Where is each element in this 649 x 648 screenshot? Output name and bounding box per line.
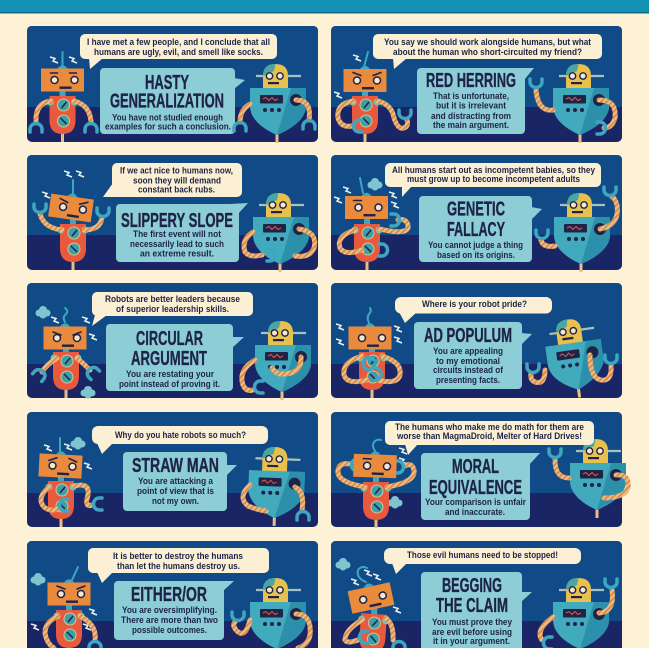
title box: red herring: RED HERRING xyxy=(426,69,516,92)
title box: straw man xyxy=(123,452,237,511)
speech bubble: either/or: than let the humans destroy us. xyxy=(117,561,240,572)
title box: straw man: point of view that is xyxy=(137,486,214,497)
speech bubble: circular argument xyxy=(92,292,253,326)
title box: moral equivalence: and inaccurate. xyxy=(445,507,505,518)
speech bubble: moral equivalence xyxy=(385,421,594,455)
panel: ad populum xyxy=(331,283,622,401)
title box: circular argument xyxy=(106,324,244,391)
title box: hasty generalization: examples for such a conclusion. xyxy=(105,122,231,132)
title box: begging the claim: THE CLAIM xyxy=(436,594,508,617)
speech bubble: slippery slope: constant back rubs. xyxy=(138,184,215,196)
robot: right listener xyxy=(536,187,617,272)
title box: slippery slope: The first event will not xyxy=(133,229,222,240)
robot: right listener xyxy=(527,315,617,401)
title box: circular argument: ARGUMENT xyxy=(131,347,207,370)
title box: ad populum: You are appealing xyxy=(433,346,503,357)
title box: straw man: not my own. xyxy=(152,496,199,507)
speech bubble: red herring: about the human who short-circuited my friend? xyxy=(393,47,582,58)
speech bubble: hasty generalization xyxy=(80,34,277,69)
title box: circular argument: point instead of proving it. xyxy=(119,379,220,390)
robot: left speaker xyxy=(33,306,99,398)
title box: moral equivalence: Your comparison is unfair xyxy=(425,497,526,508)
title box: ad populum xyxy=(414,322,532,389)
speech bubble: genetic fallacy: must grow up to become incompetent adults xyxy=(407,174,580,185)
speech bubble: begging the claim: Those evil humans need to be stopped! xyxy=(407,550,558,561)
robot: left speaker xyxy=(334,178,408,270)
title box: red herring: and distracting from xyxy=(431,111,511,122)
title box: red herring: That is unfortunate, xyxy=(433,91,509,102)
robot: left speaker xyxy=(338,440,414,528)
speech bubble: straw man xyxy=(92,426,268,454)
title box: hasty generalization xyxy=(100,68,245,134)
title box: red herring: but it is irrelevant xyxy=(436,101,507,112)
panel: circular argument xyxy=(27,283,318,400)
speech bubble: slippery slope: If we act nice to humans now, xyxy=(120,165,233,176)
speech bubble: straw man: Why do you hate robots so much? xyxy=(115,430,246,441)
speech bubble: either/or: It is better to destroy the humans xyxy=(113,551,243,562)
robot: left speaker xyxy=(30,52,97,142)
title box: begging the claim: BEGGING xyxy=(442,574,502,597)
title box: hasty generalization: HASTY xyxy=(145,71,189,94)
robot: left speaker xyxy=(336,308,402,398)
robot: right listener xyxy=(243,446,309,527)
title box: circular argument: CIRCULAR xyxy=(136,327,203,350)
title box: begging the claim: You must prove they xyxy=(432,617,513,628)
title box: moral equivalence: MORAL xyxy=(452,455,499,478)
title box: straw man: STRAW MAN xyxy=(132,454,219,477)
title box: ad populum: circuits instead of xyxy=(433,365,504,376)
title box: slippery slope: necessarily lead to such xyxy=(130,239,224,250)
title box: hasty generalization: You have not studied enough xyxy=(112,112,223,124)
speech bubble: either/or xyxy=(88,548,269,583)
speech bubble: hasty generalization: humans are ugly, evil, and smell like socks. xyxy=(94,47,263,58)
title box: slippery slope: an extreme result. xyxy=(140,249,214,260)
speech bubble: red herring: You say we should work alongside humans, but what xyxy=(384,37,592,48)
robot: right listener xyxy=(530,64,615,143)
title box: either/or xyxy=(114,581,234,640)
panel: either/or xyxy=(27,541,318,648)
title box: hasty generalization: GENERALIZATION xyxy=(110,90,224,112)
robot: right listener xyxy=(244,193,315,272)
panel: red herring xyxy=(331,26,622,143)
panel: straw man xyxy=(27,412,318,527)
speech bubble: slippery slope: soon they will demand xyxy=(133,176,221,186)
title box: begging the claim: are evil before using xyxy=(432,627,512,638)
panel: hasty generalization xyxy=(27,26,318,143)
title box: either/or: You are oversimplifying. xyxy=(122,605,217,616)
robot: left speaker xyxy=(336,558,405,648)
title box: slippery slope xyxy=(116,203,248,262)
speech bubble: genetic fallacy: All humans start out as incompetent babies, so they xyxy=(392,165,596,176)
robot: left speaker xyxy=(334,52,411,142)
title box: moral equivalence: EQUIVALENCE xyxy=(429,476,522,499)
title box: ad populum: AD POPULUM xyxy=(424,324,512,347)
title box: moral equivalence xyxy=(421,453,540,520)
title box: begging the claim: it in your argument. xyxy=(433,636,510,647)
title box: red herring xyxy=(417,68,534,134)
speech bubble: ad populum xyxy=(395,297,552,323)
robot: left speaker xyxy=(30,567,101,648)
speech bubble: slippery slope xyxy=(103,163,242,197)
title box: genetic fallacy xyxy=(419,196,542,262)
panel: genetic fallacy xyxy=(331,155,622,272)
robot: right listener xyxy=(540,578,617,648)
title box: either/or: possible outcomes. xyxy=(132,625,207,636)
speech bubble: begging the claim xyxy=(384,548,581,574)
robot: left speaker xyxy=(34,171,109,270)
speech bubble: red herring xyxy=(373,34,602,69)
robot: left speaker xyxy=(38,437,102,527)
robot: right listener xyxy=(234,64,315,143)
robot: right listener xyxy=(549,439,628,518)
title box: genetic fallacy: based on its origins. xyxy=(437,250,515,261)
speech bubble: moral equivalence: The humans who make me do math for them are xyxy=(395,422,584,433)
title box: slippery slope: SLIPPERY SLOPE xyxy=(121,209,233,232)
speech bubble: circular argument: Robots are better leaders because xyxy=(105,294,240,305)
title box: ad populum: presenting facts. xyxy=(436,375,500,386)
speech bubble: circular argument: of superior leadership skills. xyxy=(116,304,229,315)
speech bubble: moral equivalence: worse than MagmaDroid, Melter of Hard Drives! xyxy=(396,431,582,442)
title box: ad populum: to my emotional xyxy=(436,356,500,367)
panel: moral equivalence xyxy=(331,412,628,528)
panel: begging the claim xyxy=(331,541,622,648)
title box: straw man: You are attacking a xyxy=(138,476,214,487)
robot: right listener xyxy=(242,321,311,400)
title box: red herring: the main argument. xyxy=(433,120,509,131)
title box: genetic fallacy: You cannot judge a thing xyxy=(428,240,523,251)
speech bubble: genetic fallacy xyxy=(385,163,601,197)
title box: genetic fallacy: GENETIC xyxy=(447,198,505,221)
speech bubble: ad populum: Where is your robot pride? xyxy=(422,299,527,310)
title box: begging the claim xyxy=(421,572,532,648)
robot: right listener xyxy=(232,578,310,648)
title box: either/or: There are more than two xyxy=(121,615,218,626)
title box: circular argument: You are restating your xyxy=(126,369,214,380)
header band xyxy=(0,0,649,14)
panel: slippery slope xyxy=(27,155,318,272)
title box: either/or: EITHER/OR xyxy=(131,583,207,606)
title box: genetic fallacy: FALLACY xyxy=(447,218,505,241)
speech bubble: hasty generalization: I have met a few people, and I conclude that all xyxy=(87,37,270,48)
